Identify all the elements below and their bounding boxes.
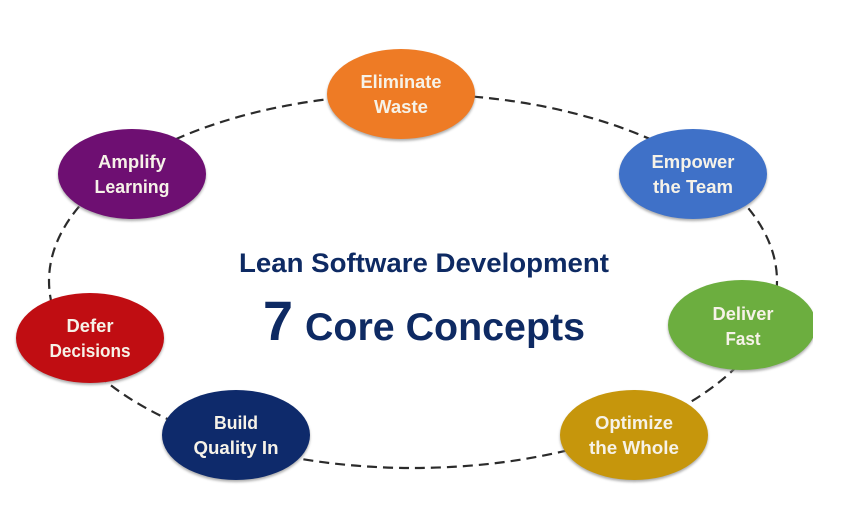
node: Optimize the Whole: Optimize <box>595 413 673 433</box>
node: Deliver Fast <box>668 280 816 372</box>
heading: 7 Core Concepts: 7 <box>263 289 293 352</box>
node: Defer Decisions <box>16 293 164 385</box>
node: Eliminate Waste: Waste <box>374 97 428 117</box>
node: Defer Decisions: Defer <box>66 316 114 336</box>
node: Deliver Fast: Deliver <box>712 304 774 324</box>
node: Optimize the Whole: the Whole <box>589 438 679 458</box>
node: Build Quality In: Quality In <box>194 438 278 458</box>
node: Deliver Fast: Fast <box>726 329 761 349</box>
heading: 7 Core Concepts <box>263 289 585 352</box>
node: Amplify Learning: Learning <box>94 177 170 197</box>
dashed cycle ring <box>49 94 777 468</box>
node: Build Quality In: Build <box>214 413 258 433</box>
node: Empower the Team <box>619 129 767 221</box>
node: Amplify Learning: Amplify <box>98 152 166 172</box>
node: Empower the Team: Empower <box>652 152 734 172</box>
node: Eliminate Waste <box>327 49 475 141</box>
node: Build Quality In <box>162 390 310 482</box>
heading: 7 Core Concepts: Core Concepts <box>305 306 585 349</box>
node: Amplify Learning <box>58 129 206 221</box>
node: Defer Decisions: Decisions <box>50 341 130 361</box>
node: Optimize the Whole <box>560 390 708 482</box>
title: Lean Software Development: Lean Software Development <box>239 248 609 278</box>
node: Empower the Team: the Team <box>653 177 733 197</box>
node: Eliminate Waste: Eliminate <box>360 72 442 92</box>
